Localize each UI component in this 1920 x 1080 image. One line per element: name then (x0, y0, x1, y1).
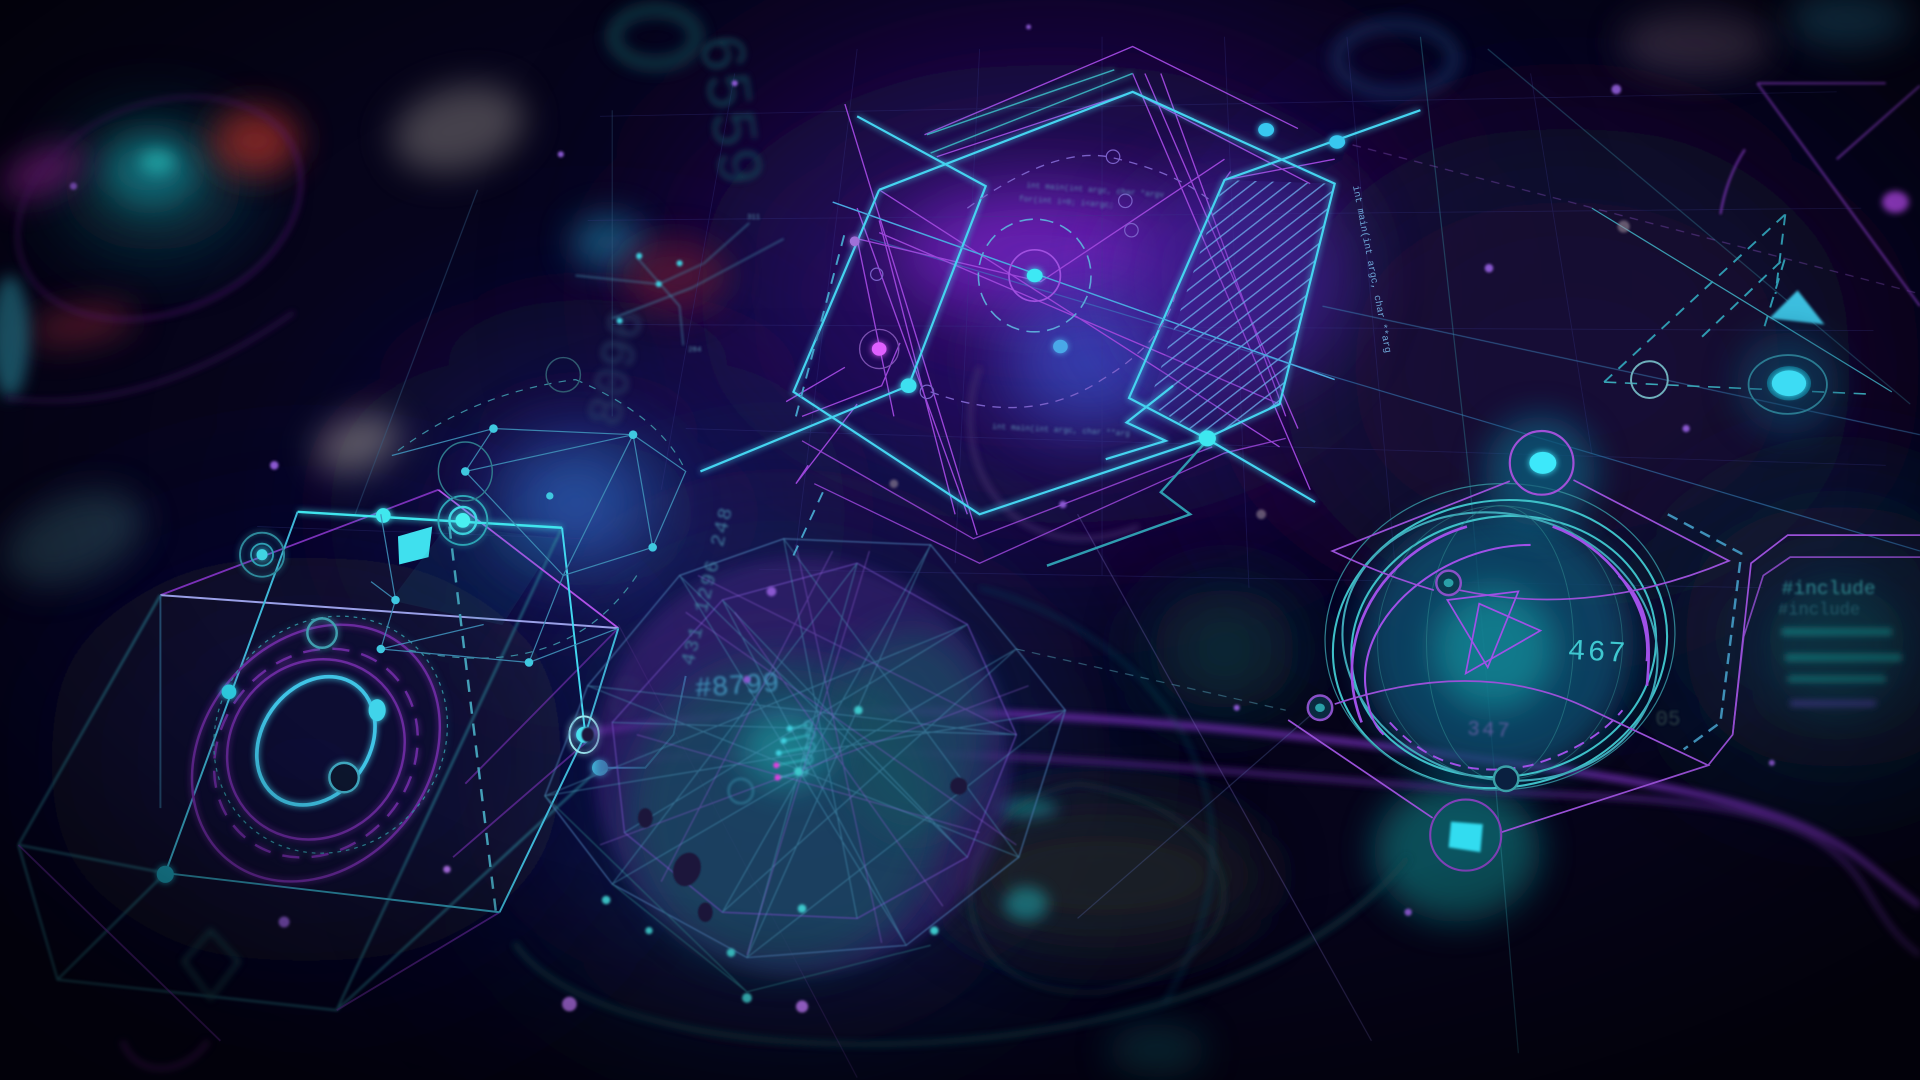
dashed baseline (1604, 382, 1873, 394)
code labels: int main(int argc, char **arg (992, 423, 1130, 439)
small red network top left: 284 (688, 346, 702, 354)
ring (1631, 361, 1668, 398)
network: nodes above cube (371, 358, 686, 667)
sphere glow (594, 557, 1010, 973)
cyan node (1736, 332, 1839, 435)
bottom orbit bands (122, 367, 1920, 1068)
code text: #include (1782, 578, 1876, 600)
panel: central sphere (545, 504, 1065, 1003)
decorated nodes on cube (240, 496, 608, 776)
cube: blurred outer frame (18, 528, 600, 1010)
panel: right code block (1656, 578, 1904, 732)
teal zigzag (1047, 435, 1212, 566)
sphere dark holes (582, 727, 967, 922)
sphere teal dots (602, 706, 939, 1003)
hatched panel (1149, 180, 1335, 438)
bottom node (1430, 800, 1501, 871)
blurred large numbers: 60 (602, 671, 657, 727)
cyan frame (700, 70, 1420, 514)
dashed connector (1668, 514, 1741, 749)
top node (1510, 431, 1573, 495)
long crossing line (833, 202, 1335, 380)
dashed target circle (978, 219, 1091, 332)
faint grid (257, 37, 1886, 588)
blurred large numbers: 6559 (681, 29, 773, 191)
gauge teal rings (1310, 469, 1690, 815)
sphere outer polygon (545, 539, 1065, 992)
panel: right circular gauge (1288, 416, 1920, 871)
small red network top left (576, 214, 784, 354)
purple diamond frame (1288, 480, 1920, 833)
blurred large numbers: 8096 (578, 305, 657, 432)
dashed arcs (790, 155, 1212, 563)
DNA marker (729, 721, 815, 803)
ghost diamond outline (184, 931, 239, 998)
sphere numeric label: #8799 (694, 669, 780, 706)
rotated numeric strip: 431 1296 248 (678, 504, 738, 668)
blurred galaxy: top left (0, 0, 1910, 605)
purple wireframe (786, 47, 1335, 563)
concentric rings (141, 568, 496, 931)
purple frame top right (1720, 83, 1920, 306)
icon: diamond (398, 527, 432, 564)
faint value: 347 (1467, 719, 1513, 744)
cube: purple edges (18, 490, 618, 1041)
icon: cyan triangle (1769, 290, 1824, 324)
code labels: for(int i=0; i<argc; (1019, 195, 1114, 210)
cyan ring with nodes (157, 618, 399, 883)
dashed triangle (1604, 214, 1785, 382)
blurred code lines (1782, 628, 1902, 707)
vertical code label: int main(int argc, char **arg (1350, 185, 1393, 354)
soft purple node (1882, 191, 1909, 213)
gauge value: 467 (1567, 635, 1629, 671)
side nodes (1308, 571, 1518, 791)
code labels (992, 181, 1165, 439)
panel: right code block: #include (1778, 602, 1860, 621)
hatched plate (392, 527, 557, 624)
magenta node (860, 329, 899, 369)
gauge glow (1359, 416, 1633, 780)
gauge purple arcs (1352, 527, 1649, 770)
faint digits: 05 (1656, 709, 1680, 732)
sphere chords (545, 539, 1065, 958)
glowing dots (850, 123, 1345, 446)
blurred large numbers (578, 29, 773, 727)
code labels: int main(int argc, char *argv (1026, 181, 1165, 200)
icon: overlapping triangles (1447, 591, 1540, 673)
small red network top left: 311 (747, 214, 761, 222)
long connecting lines (355, 37, 1920, 1078)
cube: cyan edges (160, 512, 686, 912)
panel: left cube (18, 490, 686, 1041)
solid diagonal (1592, 208, 1892, 392)
panel: top right triangle (1592, 83, 1920, 435)
panel: central hologram frame (700, 47, 1420, 566)
